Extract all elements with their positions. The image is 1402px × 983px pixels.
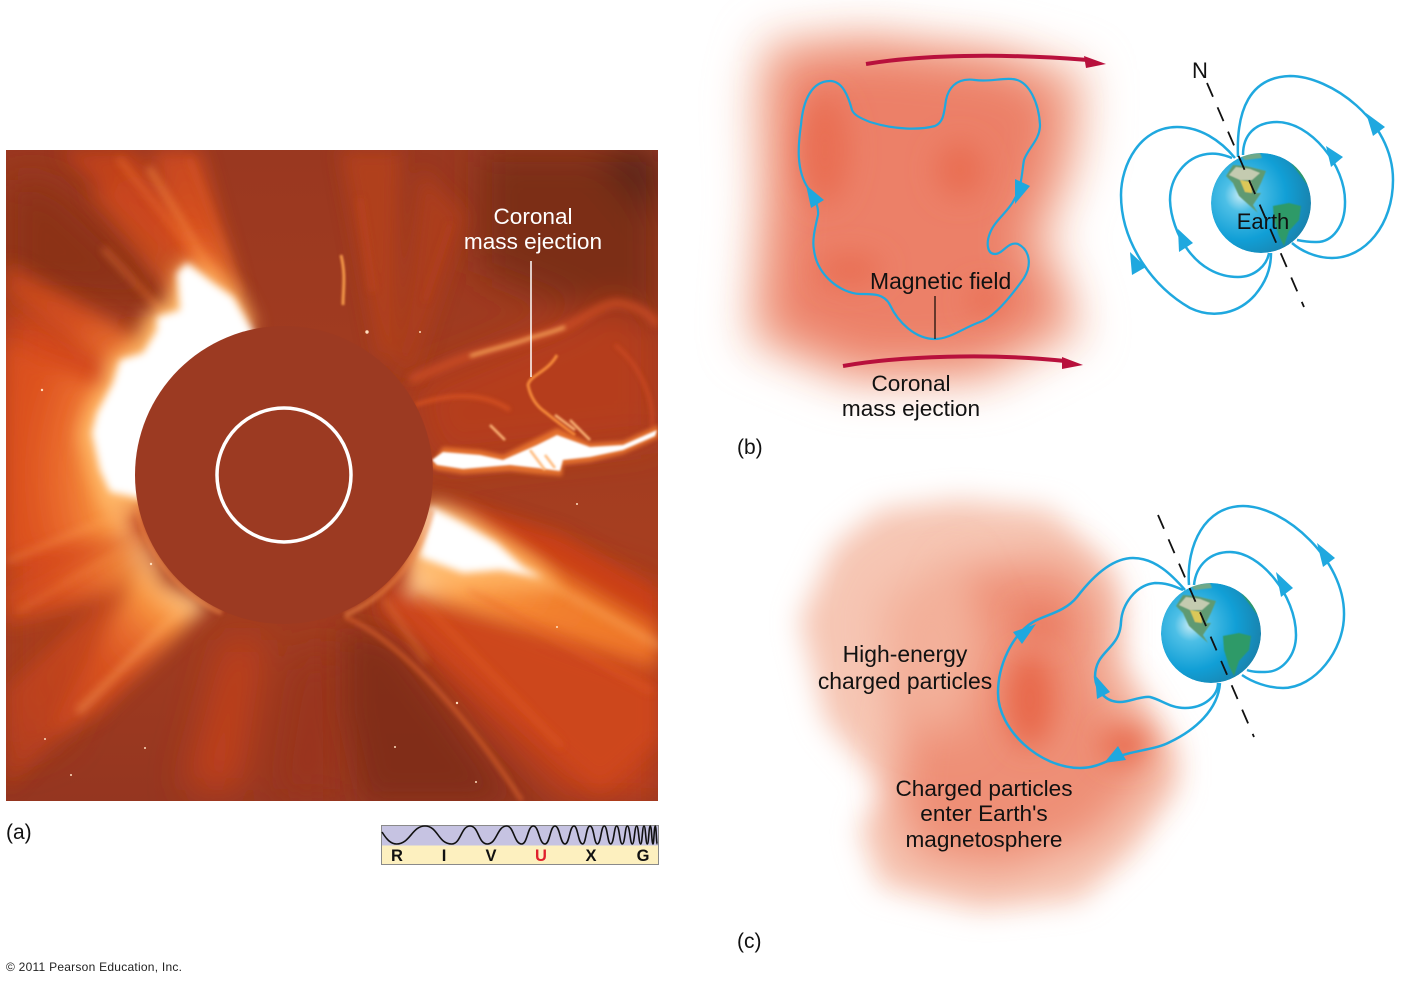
Earth globe (b) bbox=[1211, 153, 1316, 253]
label: high-energy charged particles bbox=[818, 641, 992, 694]
spectrum bar RIVUXG: X bbox=[585, 847, 597, 865]
copyright line: © 2011 Pearson Education, Inc. bbox=[6, 960, 182, 974]
solar streamers bbox=[6, 150, 658, 790]
label: coronal mass ejection (b) bbox=[842, 371, 980, 421]
spectrum bar RIVUXG: G bbox=[637, 847, 649, 865]
spectrum bar RIVUXG: U bbox=[535, 847, 547, 865]
field arrowheads (b) bbox=[1130, 113, 1385, 275]
label: coronal mass ejection (photo) bbox=[464, 204, 602, 254]
label: charged particles enter magnetosphere: Charged particles bbox=[895, 776, 1073, 801]
field arrowheads (c) bbox=[1013, 543, 1335, 763]
label: magnetic field: Magnetic field bbox=[870, 268, 1011, 294]
occulting disk bbox=[135, 326, 433, 624]
curved streak beside the dark crescent bbox=[345, 617, 522, 801]
label: N: N bbox=[1192, 58, 1208, 83]
fine streaks bbox=[10, 160, 658, 745]
Earth globe (c) bbox=[1161, 583, 1266, 683]
label: coronal mass ejection (photo): Coronal bbox=[493, 204, 573, 229]
panel (c): plasma cloud bbox=[800, 500, 1178, 910]
occulter rim bbox=[136, 505, 432, 615]
spectrum bar RIVUXG: R bbox=[391, 847, 403, 865]
label: coronal mass ejection (b): Coronal bbox=[871, 371, 951, 396]
caption (c): (c) bbox=[737, 930, 762, 953]
coronal mass ejection structure bbox=[410, 303, 658, 476]
white Sun outline ring bbox=[217, 408, 351, 542]
label: charged particles enter magnetosphere bbox=[895, 776, 1073, 852]
label: coronal mass ejection (photo): mass ejection bbox=[464, 229, 602, 254]
spectrum bar RIVUXG: I bbox=[442, 847, 446, 865]
white glare, upper left bbox=[92, 263, 255, 500]
Earth field lines (c) bbox=[998, 506, 1344, 768]
white glare, lower right bbox=[420, 506, 543, 578]
label: high-energy charged particles: charged particles bbox=[818, 668, 992, 694]
magnetic field loop bbox=[799, 79, 1040, 339]
spectrum bar RIVUXG bbox=[382, 826, 658, 865]
label: charged particles enter magnetosphere: enter Earth's bbox=[920, 801, 1048, 826]
caption (a): (a) bbox=[6, 821, 32, 844]
red arrow: top bbox=[866, 56, 1106, 68]
arrowhead: loop left bbox=[806, 185, 824, 208]
caption (b): (b) bbox=[737, 436, 763, 459]
magnetic axis dashed (c) bbox=[1158, 515, 1254, 737]
label: high-energy charged particles: High-energy bbox=[843, 641, 968, 667]
dark crescent below the occulter bbox=[345, 625, 510, 801]
scattered stars bbox=[41, 330, 578, 783]
arrowhead: loop right bbox=[1015, 179, 1030, 204]
pointer line: photo label bbox=[530, 261, 532, 377]
spectrum bar RIVUXG: V bbox=[485, 847, 497, 865]
pointer line: magnetic field bbox=[934, 296, 936, 339]
red arrow: bottom bbox=[843, 356, 1083, 369]
label: Earth: Earth bbox=[1237, 209, 1289, 234]
label: coronal mass ejection (b): mass ejection bbox=[842, 396, 980, 421]
Earth field lines (b) bbox=[1121, 76, 1393, 314]
photo panel (a): coronagraph image of the Sun bbox=[6, 150, 658, 801]
label: charged particles enter magnetosphere: magnetosphere bbox=[905, 827, 1063, 852]
panel (b): plasma cloud bbox=[745, 30, 1088, 386]
magnetic axis dashed (b) bbox=[1207, 83, 1304, 307]
orange glow round the glare bbox=[78, 262, 255, 510]
